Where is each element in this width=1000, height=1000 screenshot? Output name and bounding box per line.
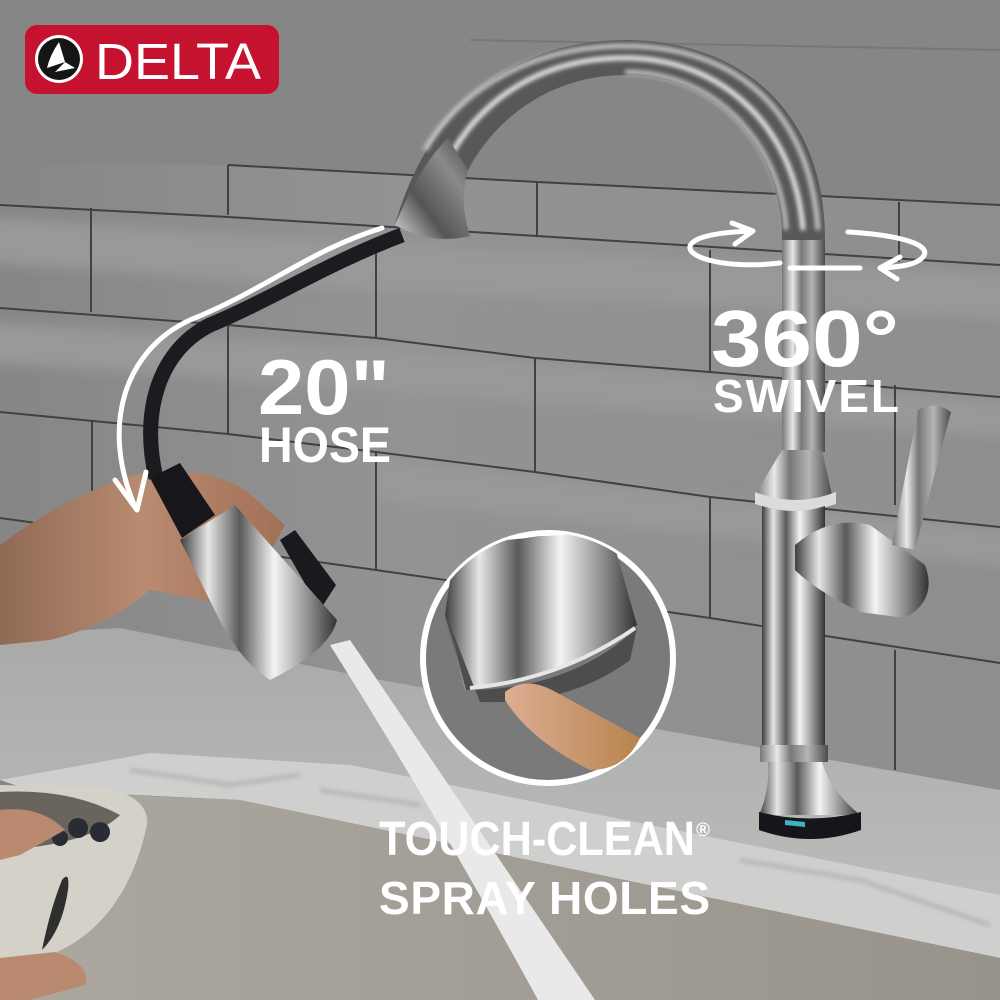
label: touch-clean spray holes: ® bbox=[696, 820, 710, 841]
label: 20 inch hose bbox=[258, 343, 391, 473]
label: 360 swivel: SWIVEL bbox=[713, 370, 899, 422]
hose arrow bbox=[115, 228, 382, 510]
spray head bbox=[150, 463, 337, 680]
hand bbox=[0, 471, 285, 645]
label: 20 inch hose: HOSE bbox=[259, 417, 391, 473]
countertop bbox=[0, 628, 1000, 905]
faucet bbox=[395, 40, 951, 839]
faucet handle bbox=[795, 522, 929, 618]
upper wall band bbox=[0, 0, 1000, 205]
hose bbox=[151, 235, 402, 478]
water stream bbox=[330, 640, 595, 1000]
Delta logo bbox=[25, 25, 279, 94]
label: 20 inch hose: 20" bbox=[258, 343, 390, 431]
faucet spout arc bbox=[395, 40, 825, 450]
bowl hand bbox=[0, 809, 86, 1000]
blueberries bbox=[52, 818, 110, 846]
lighter tile rows bbox=[0, 215, 1000, 570]
fingertip bbox=[505, 683, 640, 770]
faucet base bbox=[759, 812, 861, 839]
counter front edge bbox=[0, 753, 1000, 958]
label: 360 swivel bbox=[711, 294, 899, 422]
Delta wordmark: DELTA bbox=[95, 33, 261, 90]
bowl bbox=[0, 785, 147, 960]
faucet body bbox=[755, 450, 832, 502]
tile grout lines bbox=[0, 40, 1000, 770]
sink basin bbox=[0, 790, 1000, 1000]
marble veining bbox=[130, 770, 990, 925]
label: touch-clean spray holes: TOUCH-CLEAN bbox=[379, 813, 695, 866]
swivel arrows bbox=[690, 223, 925, 279]
label: 360 swivel: 360° bbox=[711, 294, 899, 383]
inset circle bbox=[423, 530, 673, 783]
label: touch-clean spray holes: SPRAY HOLES bbox=[379, 872, 710, 924]
label: touch-clean spray holes bbox=[379, 813, 710, 924]
